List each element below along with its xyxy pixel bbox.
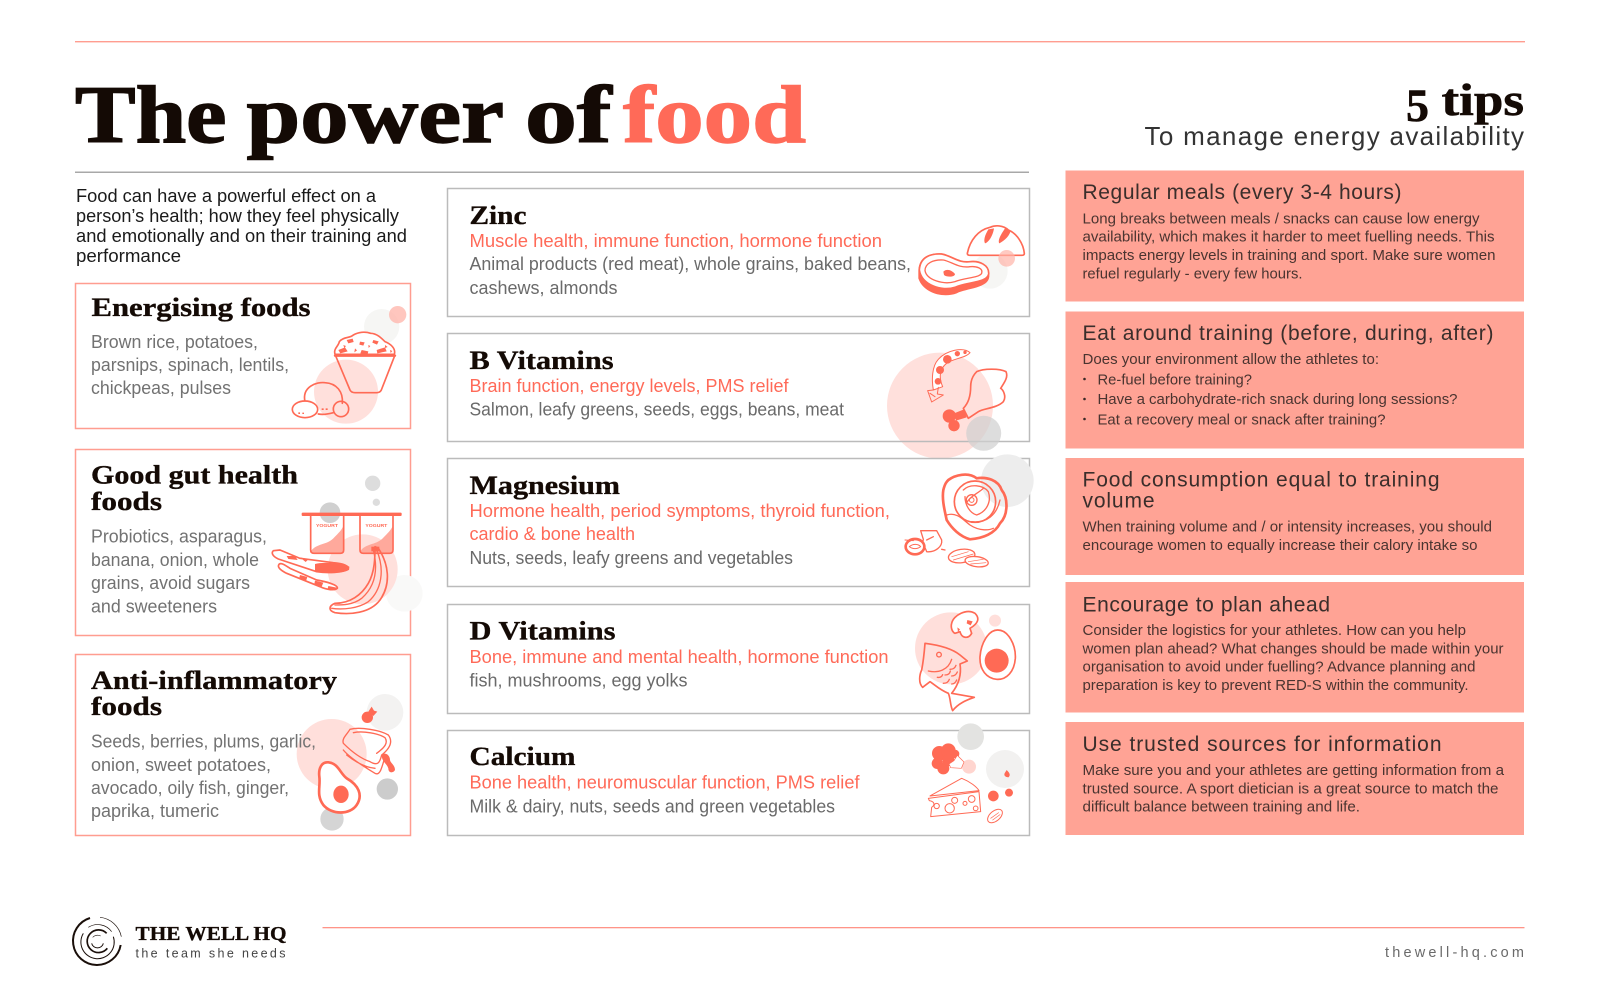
- sources: Animal products (red meat), whole grains, baked beans,: [470, 254, 911, 274]
- panel: anti-inflammatory foods: [76, 654, 410, 836]
- tip text: impacts energy levels in training and sport. Make sure women: [1082, 247, 1496, 264]
- food list: and sweeteners: [91, 596, 217, 616]
- intro text: [76, 186, 407, 266]
- tip text: [1082, 622, 1504, 694]
- grey circle: [966, 416, 1001, 451]
- benefits: Brain function, energy levels, PMS relief: [470, 376, 789, 396]
- heading: Good gut health: [91, 460, 299, 490]
- icon: rice bowl and potatoes: [292, 306, 406, 424]
- sources: cashews, almonds: [470, 278, 618, 298]
- tip text: Make sure you and your athletes are getting information from a: [1082, 762, 1505, 779]
- tip text: Eat a recovery meal or snack after training?: [1098, 412, 1386, 428]
- tip text: organisation to avoid under fuelling? Advance planning and: [1082, 658, 1476, 676]
- icon: yogurt, asparagus and banana: YOGURT: [316, 523, 338, 529]
- tip text: encourage women to equally increase their calory intake so: [1082, 537, 1478, 554]
- sources: Nuts, seeds, leafy greens and vegetables: [470, 548, 793, 568]
- tip heading: [1082, 468, 1440, 512]
- heading: [91, 460, 299, 516]
- panel: calcium: [448, 723, 1030, 836]
- tip text: refuel regularly - every few hours.: [1082, 266, 1302, 282]
- heading: 5 tips: tips: [1442, 74, 1524, 125]
- tip heading: volume: [1082, 490, 1154, 512]
- panel: tip 3 food consumption: [1066, 458, 1524, 575]
- tip text: [1082, 210, 1496, 282]
- title: food: [623, 69, 806, 160]
- title: power: [246, 69, 504, 160]
- benefits: Bone, immune and mental health, hormone function: [470, 647, 888, 667]
- benefits: Bone health, neuromuscular function, PMS relief: [470, 772, 860, 792]
- heading: Magnesium: [470, 471, 620, 500]
- tip text: difficult balance between training and life.: [1082, 798, 1360, 816]
- tip text: women plan ahead? What changes should be made within your: [1082, 640, 1504, 658]
- panel: tip 1 regular meals: [1066, 170, 1524, 302]
- brand name: [136, 923, 286, 960]
- icon: broccoli, cheese, berries: [928, 723, 1024, 825]
- heading: foods: [91, 692, 162, 721]
- food list: chickpeas, pulses: [91, 378, 231, 398]
- benefits: Hormone health, period symptoms, thyroid function,: [470, 501, 890, 521]
- tip text: Have a carbohydrate-rich snack during long sessions?: [1098, 391, 1458, 408]
- sources: Milk & dairy, nuts, seeds and green vegetables: [470, 796, 835, 816]
- tip text: preparation is key to prevent RED-S within the community.: [1082, 677, 1468, 694]
- food list: [91, 526, 267, 616]
- panel: d vitamins: [448, 604, 1030, 714]
- food list: parsnips, spinach, lentils,: [91, 355, 289, 375]
- heading: foods: [91, 487, 162, 516]
- benefits: cardio & bone health: [470, 524, 635, 544]
- tip text: Consider the logistics for your athletes. How can you help: [1082, 622, 1466, 639]
- benefits: [470, 501, 890, 544]
- tip heading: Food consumption equal to training: [1082, 468, 1440, 492]
- food list: Seeds, berries, plums, garlic,: [91, 732, 316, 752]
- title: of: [525, 69, 614, 160]
- heading: D Vitamins: [470, 616, 616, 646]
- heading: [91, 666, 337, 721]
- tip heading: Eat around training (before, during, after): [1082, 322, 1494, 345]
- panel: good gut health foods: [76, 450, 423, 636]
- tip text: [1082, 518, 1492, 554]
- panel: zinc: [448, 188, 1030, 316]
- heading: B Vitamins: [470, 346, 614, 375]
- icon: yogurt, asparagus and banana: [272, 476, 423, 614]
- panel: tip 4 plan ahead: [1066, 582, 1524, 712]
- intro text: Food can have a powerful effect on a: [76, 186, 377, 206]
- heading: Anti-inflammatory: [91, 666, 337, 695]
- intro text: person’s health; how they feel physically: [76, 206, 399, 226]
- sources: Salmon, leafy greens, seeds, eggs, beans, meat: [470, 400, 844, 420]
- tip text: [1082, 762, 1505, 816]
- food list: banana, onion, whole: [91, 550, 259, 570]
- subheading: To manage energy availability: [1144, 121, 1524, 151]
- tip heading: Regular meals (every 3-4 hours): [1082, 181, 1402, 204]
- intro text: and emotionally and on their training and: [76, 226, 407, 246]
- food list: grains, avoid sugars: [91, 573, 250, 593]
- tip text: When training volume and / or intensity increases, you should: [1082, 518, 1492, 536]
- title: [75, 69, 806, 160]
- website: thewell-hq.com: [1385, 945, 1524, 961]
- tip text: Does your environment allow the athletes to:: [1082, 351, 1379, 368]
- heading: Calcium: [470, 742, 576, 771]
- food list: [91, 332, 289, 398]
- sources: fish, mushrooms, egg yolks: [470, 670, 688, 690]
- intro text: performance: [76, 246, 181, 266]
- icon: leafy greens and nuts: [905, 454, 1034, 568]
- panel: energising foods: [76, 284, 410, 428]
- tip text: availability, which makes it harder to meet fuelling needs. This: [1082, 228, 1494, 246]
- panel: tip 5 trusted sources: [1066, 722, 1524, 835]
- tip heading: Encourage to plan ahead: [1082, 594, 1330, 616]
- icon: yogurt, asparagus and banana: YOGURT: [365, 523, 387, 529]
- panel: magnesium: [448, 454, 1034, 586]
- heading: 5 tips: [1406, 74, 1524, 132]
- icon: fish, mushroom and egg: [915, 612, 1015, 711]
- food list: onion, sweet potatoes,: [91, 755, 271, 775]
- panel: tip 2 eat around training: [1066, 312, 1524, 448]
- icon: the well hq logo: [73, 917, 121, 965]
- benefits: Muscle health, immune function, hormone function: [470, 231, 882, 251]
- tip text: [1082, 351, 1458, 428]
- tip heading: Use trusted sources for information: [1082, 733, 1442, 756]
- heading: Zinc: [470, 201, 526, 230]
- food list: Brown rice, potatoes,: [91, 332, 258, 352]
- icon: pea pod and chicken leg: [887, 350, 1007, 459]
- sources: [470, 254, 911, 298]
- food list: Probiotics, asparagus,: [91, 526, 267, 546]
- brand name: the team she needs: [136, 946, 286, 960]
- food list: avocado, oily fish, ginger,: [91, 778, 289, 798]
- icon: bread and steak: [918, 226, 1024, 295]
- icon: avocado, sweet potato, berry: [297, 694, 403, 831]
- food list: [91, 732, 316, 821]
- tip text: Long breaks between meals / snacks can cause low energy: [1082, 210, 1480, 228]
- tip text: Re-fuel before training?: [1098, 372, 1252, 388]
- tip text: trusted source. A sport dietician is a great source to match the: [1082, 780, 1498, 798]
- food list: paprika, tumeric: [91, 801, 219, 821]
- heading: 5 tips: 5: [1406, 80, 1429, 132]
- heading: Energising foods: [92, 293, 310, 322]
- title: The: [75, 69, 226, 160]
- brand name: THE WELL HQ: [136, 923, 286, 945]
- panel: b vitamins: [448, 334, 1030, 459]
